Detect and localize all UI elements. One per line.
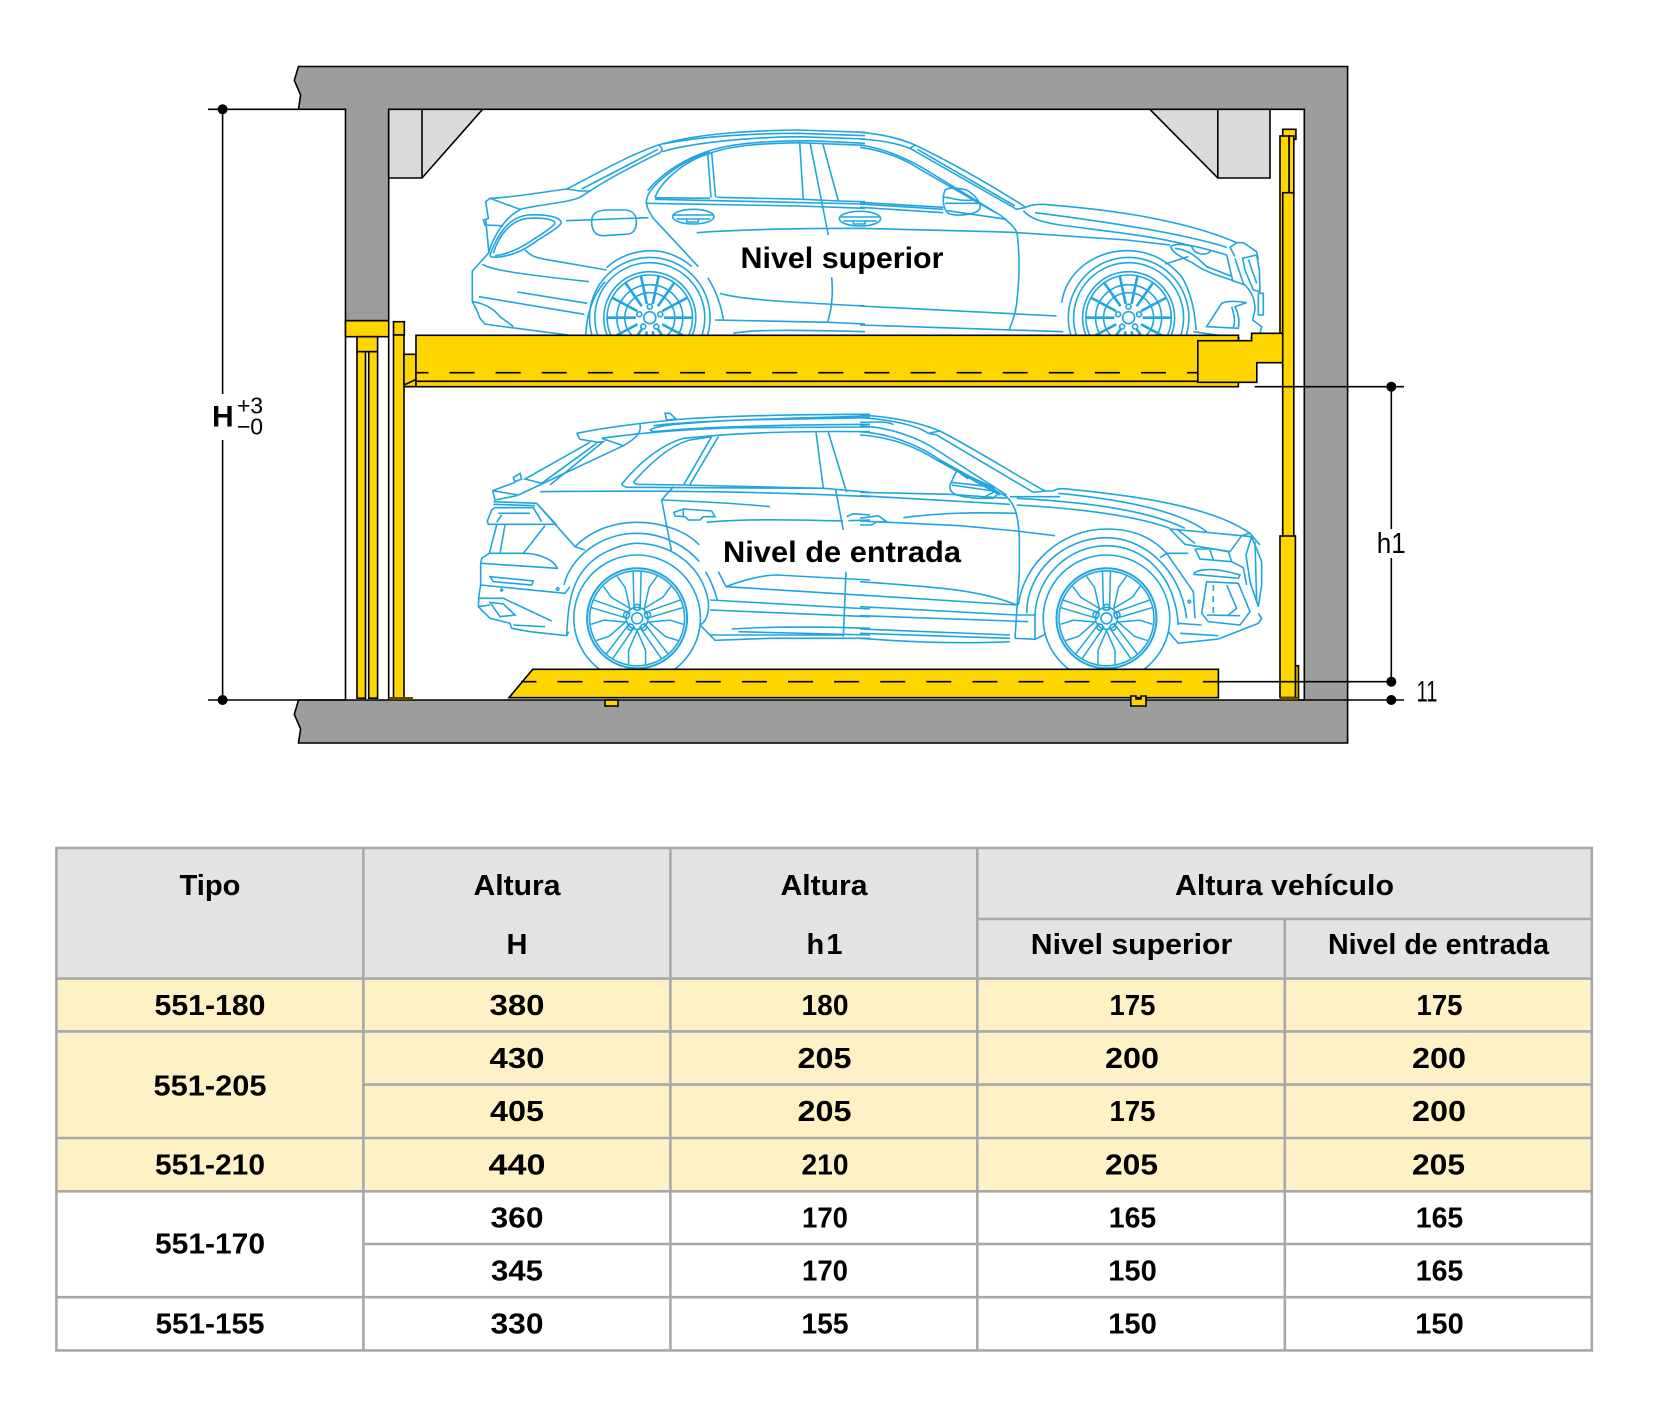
row 551-210: 205 <box>1105 1149 1158 1181</box>
dimension 11 <box>1206 676 1438 709</box>
left lift posts <box>346 321 413 700</box>
row 551-155: 155 <box>802 1309 848 1341</box>
row 551-210: 210 <box>802 1149 848 1181</box>
H tolerance label <box>212 392 263 439</box>
lower platform <box>509 669 1218 706</box>
row 551-210: 440 <box>488 1149 546 1181</box>
row 551-155: 150 <box>1415 1309 1464 1341</box>
ceiling slab and right wall <box>294 66 1348 743</box>
front wheel, upper car <box>1068 257 1189 378</box>
table header: Altura <box>474 870 561 902</box>
row 551-170: 170 <box>802 1202 848 1234</box>
label background: Nivel de entrada <box>716 532 964 570</box>
H tolerance label: −0 <box>237 413 263 439</box>
row 551-205: 200 <box>1105 1043 1159 1075</box>
table header: Tipo <box>180 870 240 902</box>
row 551-205: 200 <box>1412 1043 1466 1075</box>
sedan rear half <box>472 130 881 335</box>
floor anchor right <box>1131 696 1146 706</box>
H tolerance label: +3 <box>237 392 263 418</box>
dimension h1 <box>1255 382 1406 682</box>
sedan front half <box>860 132 1263 338</box>
rear wheel, upper car <box>590 257 710 378</box>
H tolerance label: H <box>212 401 234 434</box>
upper car wheels <box>590 257 1189 378</box>
SUV rear half <box>478 413 870 640</box>
row 551-155: 150 <box>1108 1309 1157 1341</box>
row 551-205: 430 <box>490 1043 544 1075</box>
table header: h1 <box>806 929 842 961</box>
rear wheel, lower car <box>574 555 700 682</box>
upper car outline: sedan <box>472 130 1263 338</box>
table header <box>180 870 1550 961</box>
row 551-170: 165 <box>1416 1202 1463 1234</box>
front wheel, lower car <box>1043 555 1170 682</box>
label: Nivel superior: Nivel superior <box>740 242 944 275</box>
SUV front half <box>860 415 1262 643</box>
table header: Nivel superior <box>1031 929 1232 961</box>
row 551-205: 200 <box>1412 1096 1466 1128</box>
h1 label: h1 <box>1377 528 1406 560</box>
dimension H <box>208 104 345 705</box>
row 551-170: 150 <box>1108 1255 1157 1287</box>
row 551-205: 205 <box>798 1043 852 1075</box>
upper platform <box>404 333 1284 387</box>
table header: H <box>507 929 527 961</box>
row 551-170: 360 <box>490 1202 544 1234</box>
row 551-205: 405 <box>490 1096 544 1128</box>
left ceiling beam <box>389 109 483 178</box>
11 label: 11 <box>1416 676 1438 709</box>
row 551-180: 175 <box>1416 990 1462 1022</box>
lower car outline: SUV <box>478 413 1262 643</box>
row 551-170: 165 <box>1416 1255 1463 1287</box>
row 551-210: 551-210 <box>155 1149 265 1181</box>
table header: Nivel de entrada <box>1328 929 1550 961</box>
row 551-170: 170 <box>802 1255 848 1287</box>
row 551-205: 551-205 <box>154 1070 266 1102</box>
row 551-205 <box>154 1043 1466 1128</box>
row 551-180 <box>154 990 1462 1022</box>
row 551-180: 380 <box>490 990 544 1022</box>
platform right bracket <box>1198 333 1284 382</box>
table grid <box>56 848 1592 1350</box>
row 551-170: 165 <box>1109 1202 1156 1234</box>
row 551-155: 330 <box>490 1309 544 1341</box>
lower car wheels <box>574 555 1170 682</box>
label background: Nivel superior <box>715 238 947 276</box>
table <box>56 848 1592 1350</box>
table header: Altura vehículo <box>1175 870 1394 902</box>
row 551-205: 175 <box>1110 1096 1156 1128</box>
label: Nivel de entrada: Nivel de entrada <box>723 536 961 569</box>
row 551-170 <box>155 1202 1463 1287</box>
floor anchor left <box>605 700 618 706</box>
right ceiling beam <box>1150 109 1270 178</box>
row 551-210 <box>155 1149 1465 1181</box>
table backgrounds <box>56 848 1592 1350</box>
row 551-180: 180 <box>802 990 848 1022</box>
row 551-210: 205 <box>1412 1149 1465 1181</box>
row 551-170: 345 <box>491 1255 543 1287</box>
row 551-155: 551-155 <box>156 1309 264 1341</box>
row 551-170: 551-170 <box>155 1228 265 1260</box>
row 551-155 <box>156 1309 1464 1341</box>
table header: Altura <box>780 870 868 902</box>
row 551-205: 205 <box>798 1096 852 1128</box>
right lift post <box>1280 129 1298 700</box>
building structure: concrete section <box>294 66 1348 743</box>
row 551-180: 175 <box>1110 990 1156 1022</box>
row 551-180: 551-180 <box>154 990 266 1022</box>
